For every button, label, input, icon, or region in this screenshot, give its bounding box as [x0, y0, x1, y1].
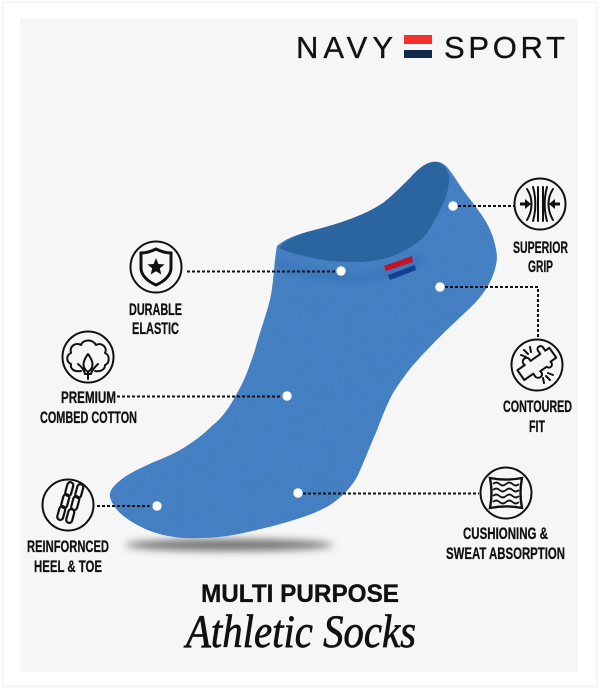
heading: athletic socks: Athletic Socks: [183, 606, 416, 658]
label: durable elastic: ELASTIC: [132, 319, 179, 338]
sock opening: [279, 162, 449, 262]
label: premium combed cotton: COMBED COTTON: [40, 408, 137, 427]
sock illustration: [110, 162, 497, 538]
connector: cushioning: [303, 492, 479, 494]
icon: cotton: [62, 332, 114, 382]
connector: durable elastic: [187, 270, 337, 272]
label: cushioning and sweat absorption: [446, 524, 565, 563]
label: premium combed cotton: PREMIUM: [61, 388, 116, 407]
label: superior grip: GRIP: [528, 257, 553, 276]
label: reinforced heel and toe: [27, 537, 109, 576]
sock shadow: [125, 539, 333, 551]
connector: contoured fit: [445, 287, 538, 338]
sock logo stripes: [384, 256, 416, 280]
label: contoured fit: [503, 397, 572, 436]
icon: cushion: [480, 468, 532, 518]
label: contoured fit: FIT: [529, 417, 545, 436]
logo: Navy Sport: NAVY: [296, 30, 393, 65]
logo: Navy Sport: [296, 30, 565, 65]
label: durable elastic: DURABLE: [129, 300, 182, 319]
icon: puzzle: [512, 340, 562, 390]
icon: shield star: [130, 242, 182, 292]
connector: premium combed cotton: [117, 396, 283, 398]
callout dots: [152, 201, 458, 511]
connector: reinforced heel and toe: [97, 505, 153, 507]
label: superior grip: SUPERIOR: [513, 238, 568, 257]
heading: multi purpose: MULTI PURPOSE: [201, 580, 399, 608]
label: durable elastic: [129, 300, 182, 338]
connector: superior grip: [458, 205, 514, 207]
icon: chain links: [42, 480, 94, 530]
label: cushioning and sweat absorption: CUSHIONING &: [463, 524, 548, 543]
collar rib: [277, 258, 423, 278]
label: reinforced heel and toe: HEEL & TOE: [34, 557, 102, 576]
label: premium combed cotton: [40, 388, 137, 427]
label: reinforced heel and toe: REINFORNCED: [27, 537, 109, 556]
logo: Navy Sport: SPORT: [444, 30, 565, 65]
label: superior grip: [513, 238, 568, 276]
icon: compression arrows: [514, 178, 566, 230]
